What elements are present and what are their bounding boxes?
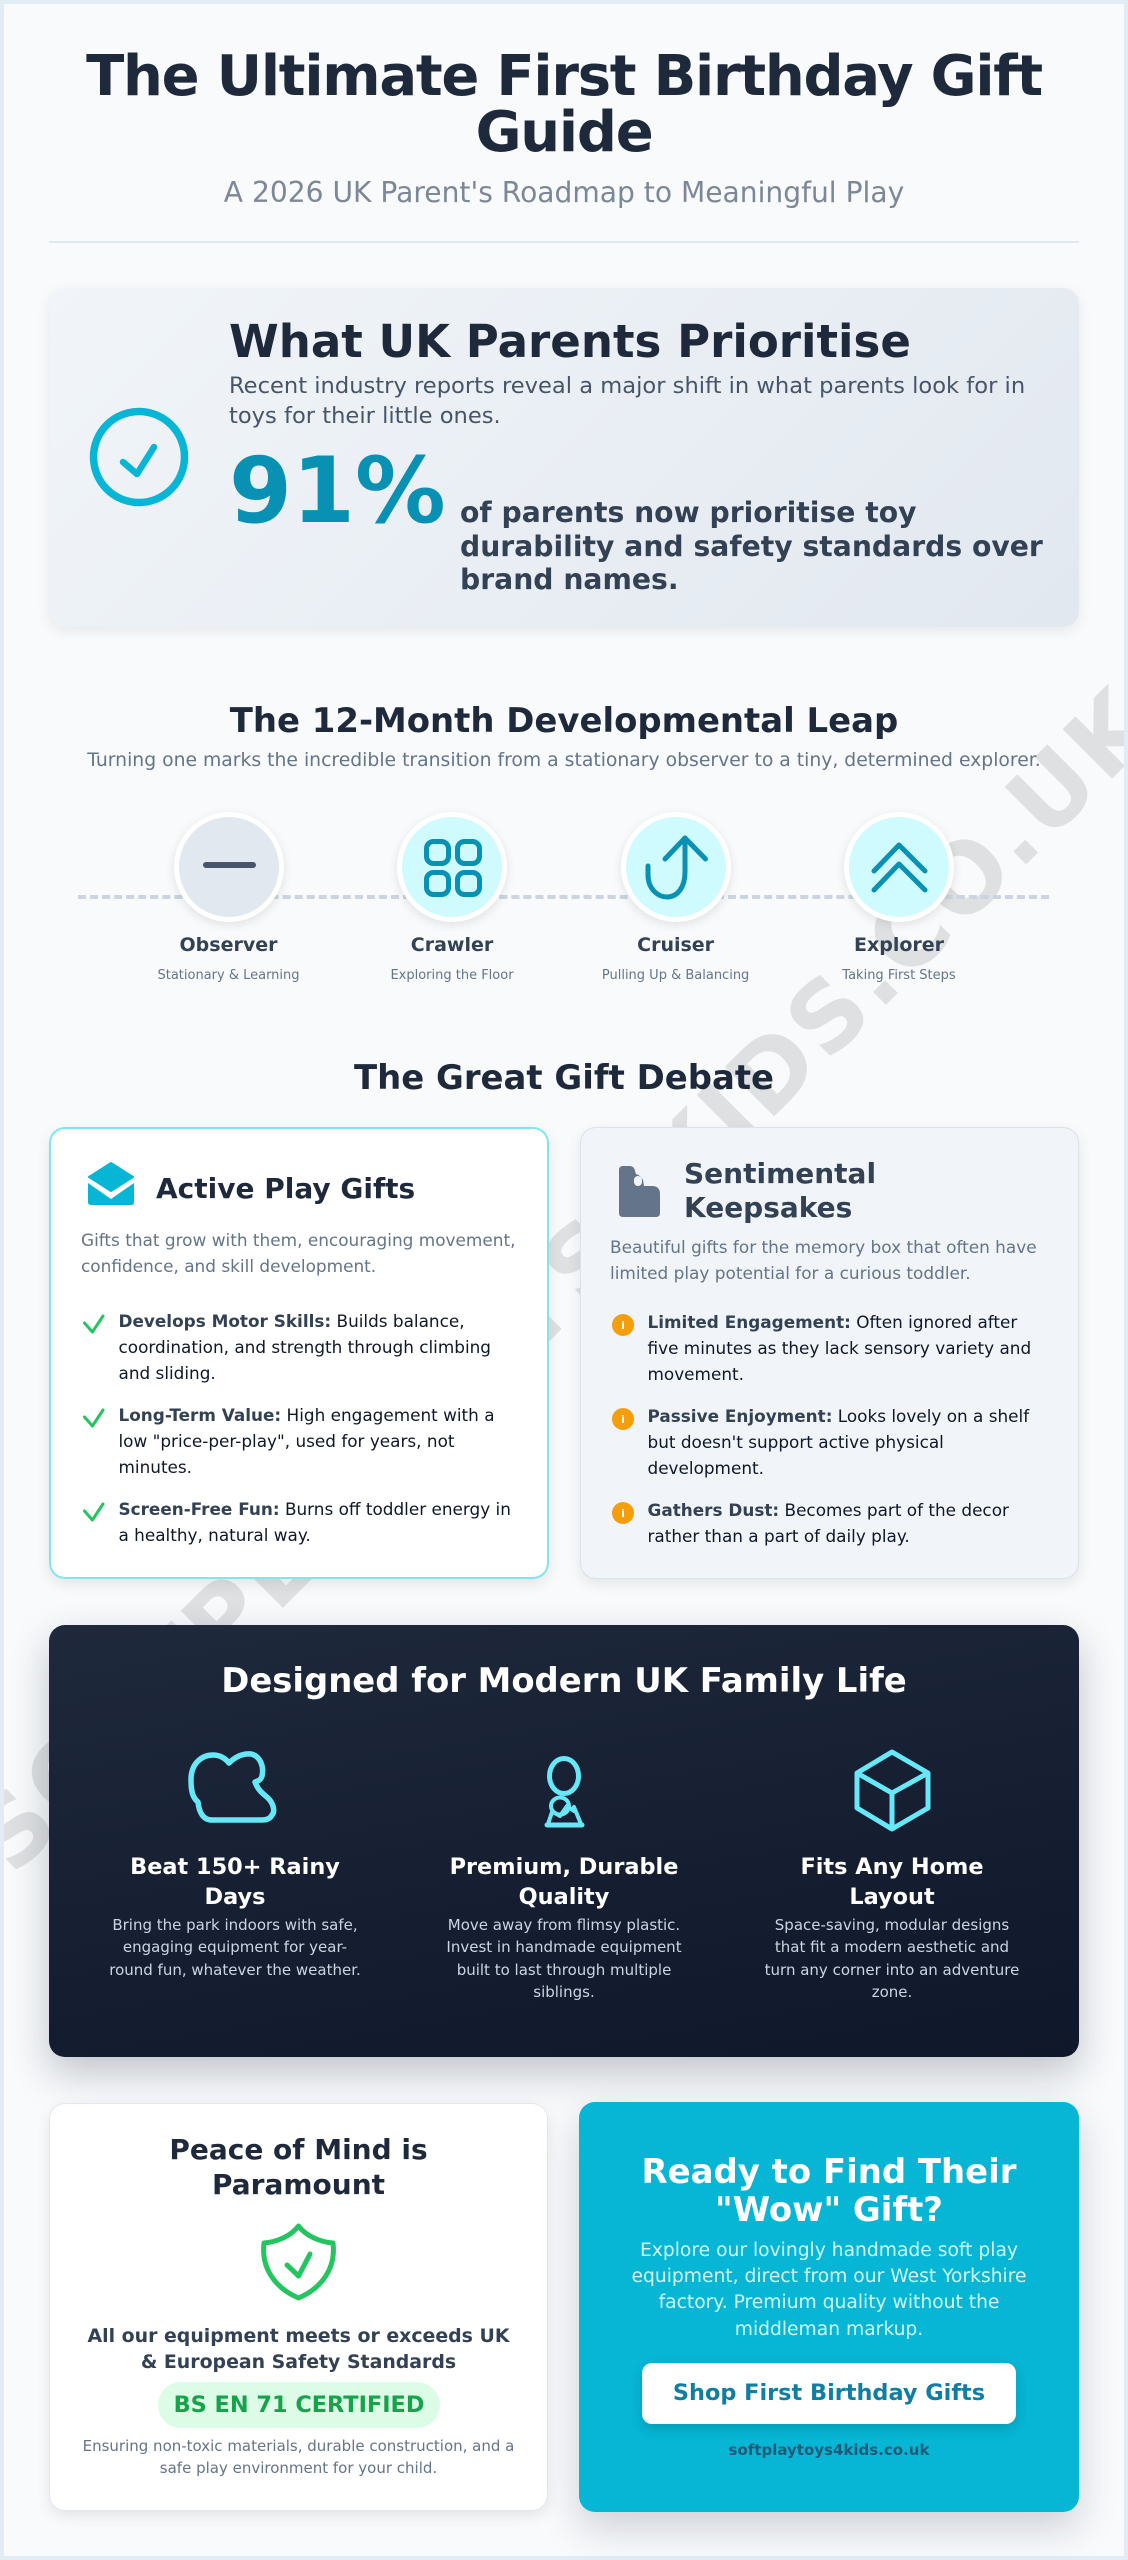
feature title: durable quality: Premium, Durable <box>450 1854 678 1880</box>
text: intro: Recent industry reports reveal a major shift in what parents look for in <box>229 373 1025 399</box>
feature text: home layout: turn any corner into an adventure <box>765 1960 1019 1978</box>
heading: active play gifts: Active Play Gifts <box>156 1172 415 1205</box>
heading: call to action: "Wow" Gift? <box>715 2190 943 2229</box>
text: stat description: durability and safety standards over <box>460 530 1043 563</box>
list item: passive enjoyment: Passive Enjoyment: Looks lovely on a shelf <box>648 1406 1029 1426</box>
list item: limited engagement: Limited Engagement: Often ignored after <box>648 1312 1017 1332</box>
step: cruiser <box>602 817 749 982</box>
icon: grid <box>397 812 507 922</box>
list item: screen-free fun <box>118 1499 511 1545</box>
text: call to action: Explore our lovingly handmade soft play <box>640 2240 1018 2261</box>
heading: sentimental keepsakes <box>684 1157 876 1224</box>
feature text: durable quality: built to last through multiple <box>457 1960 671 1978</box>
heading: sentimental keepsakes: Keepsakes <box>684 1191 852 1224</box>
title: The Ultimate First Birthday Gift <box>86 44 1042 109</box>
feature text: durable quality: Invest in handmade equipment <box>446 1938 682 1956</box>
heading: gift debate: The Great Gift Debate <box>354 1058 774 1097</box>
icon: award figure <box>544 1756 584 1828</box>
heading: what UK parents prioritise: What UK Parents Prioritise <box>229 315 911 368</box>
heading: peace of mind <box>169 2133 428 2200</box>
list item: long-term value: low "price-per-play", used for years, not <box>118 1431 454 1451</box>
feature title: durable quality: Quality <box>519 1884 609 1910</box>
label: explorer: Explorer <box>854 934 944 956</box>
label: cruiser: Cruiser <box>637 934 714 956</box>
stat: 91%: 91% <box>229 439 446 544</box>
feature text: durable quality: Move away from flimsy plastic. <box>448 1916 680 1934</box>
icon: info <box>612 1408 634 1430</box>
text: sentimental description: Beautiful gifts for the memory box that often have <box>610 1237 1037 1257</box>
feature text: home layout: zone. <box>872 1983 912 2001</box>
list item: limited engagement: movement. <box>648 1364 744 1384</box>
list item: gathers dust <box>648 1500 1009 1546</box>
text: safety note: Ensuring non-toxic materials, durable construction, and a <box>83 2436 514 2454</box>
text: call to action <box>579 2238 1079 2343</box>
list item: passive enjoyment: but doesn't support active physical <box>648 1432 944 1452</box>
icon: check <box>82 1408 105 1428</box>
list item: limited engagement <box>648 1312 1031 1384</box>
list item: motor skills: and sliding. <box>118 1363 216 1383</box>
feature text: rainy days: engaging equipment for year- <box>123 1938 347 1956</box>
label: observer: Observer <box>180 934 277 956</box>
feature text: rainy days: Bring the park indoors with safe, <box>112 1916 358 1934</box>
list item: limited engagement: five minutes as they lack sensory variety and <box>648 1338 1031 1358</box>
icon: info: i <box>621 1413 625 1426</box>
panel: what UK parents prioritise <box>49 288 1079 627</box>
feature title: home layout: Layout <box>849 1884 935 1910</box>
icon: check <box>82 1502 105 1522</box>
label: crawler: Crawler <box>411 934 493 956</box>
text: intro: toys for their little ones. <box>229 402 501 428</box>
text: developmental leap intro: Turning one marks the incredible transition from a stationary observer to a tiny, determined explorer. <box>87 750 1041 771</box>
list item: passive enjoyment: development. <box>648 1458 764 1478</box>
text: call to action: factory. Premium quality without the <box>659 2292 999 2313</box>
caption: cruiser: Pulling Up & Balancing <box>602 968 749 982</box>
heading: peace of mind: Peace of Mind is <box>169 2133 428 2166</box>
button: shop gifts <box>642 2363 1016 2424</box>
icon: info <box>612 1314 634 1336</box>
feature title: home layout <box>800 1854 984 1910</box>
text: stat description: of parents now prioritise toy <box>460 496 917 529</box>
text: call to action: middleman markup. <box>735 2319 923 2340</box>
step: crawler <box>390 817 514 982</box>
feature title: rainy days: Days <box>205 1884 265 1910</box>
heading: modern UK family life: Designed for Modern UK Family Life <box>221 1661 907 1700</box>
feature title: rainy days <box>130 1854 340 1910</box>
feature text: durable quality: siblings. <box>533 1983 595 2001</box>
icon: shield check <box>261 2224 336 2300</box>
list item: motor skills: Develops Motor Skills: Builds balance, <box>118 1311 465 1331</box>
panel: modern UK family life <box>49 1625 1079 2057</box>
caption: crawler: Exploring the Floor <box>390 968 514 982</box>
icon: minus <box>174 812 284 922</box>
list item: screen-free fun: a healthy, natural way. <box>118 1525 311 1545</box>
text: intro <box>229 373 1025 428</box>
icon: open box <box>88 1162 134 1205</box>
title: Guide <box>476 100 652 165</box>
icon: info <box>612 1502 634 1524</box>
text: safety note <box>49 2434 548 2480</box>
panel: call to action <box>579 2102 1079 2512</box>
title <box>86 44 1042 165</box>
text: stat description <box>460 496 1043 596</box>
icon: keepsake <box>619 1166 660 1217</box>
icon: cloud <box>188 1751 276 1823</box>
list item: long-term value: minutes. <box>118 1457 192 1477</box>
feature title: home layout: Fits Any Home <box>800 1854 984 1880</box>
feature text: rainy days: round fun, whatever the weather. <box>109 1960 361 1978</box>
subtitle: A 2026 UK Parent's Roadmap to Meaningful Play <box>224 176 904 209</box>
list item: long-term value: Long-Term Value: High engagement with a <box>118 1405 495 1425</box>
icon: check circle <box>90 408 188 506</box>
text: call to action: equipment, direct from our West Yorkshire <box>632 2266 1026 2287</box>
icon: double chevron <box>844 812 954 922</box>
heading: developmental leap: The 12-Month Developmental Leap <box>230 701 898 740</box>
button: shop gifts: Shop First Birthday Gifts <box>673 2380 985 2406</box>
text: safety standards <box>88 2324 510 2372</box>
feature text: home layout: Space-saving, modular designs <box>775 1916 1009 1934</box>
icon: box <box>854 1750 930 1832</box>
text: safety note: safe play environment for your child. <box>160 2459 437 2477</box>
text: active play description: confidence, and skill development. <box>81 1256 376 1276</box>
panel: active play gifts <box>49 1127 549 1579</box>
heading: call to action: Ready to Find Their <box>642 2152 1016 2190</box>
text: stat description: brand names. <box>460 563 679 596</box>
text: active play description <box>81 1230 515 1276</box>
icon: check <box>82 1314 105 1334</box>
panel: peace of mind <box>49 2103 548 2511</box>
step: observer <box>157 817 300 982</box>
step: explorer <box>842 817 956 982</box>
text: website: softplaytoys4kids.co.uk <box>729 2441 929 2459</box>
text: sentimental description: limited play potential for a curious toddler. <box>610 1263 971 1283</box>
feature text: rainy days <box>109 1916 361 1978</box>
feature: rainy days <box>109 1751 361 1978</box>
icon: info: i <box>621 1507 625 1520</box>
feature title: durable quality <box>450 1854 678 1910</box>
heading: sentimental keepsakes: Sentimental <box>684 1157 876 1190</box>
panel: sentimental keepsakes <box>580 1127 1079 1579</box>
feature: durable quality <box>446 1756 682 2001</box>
feature title: rainy days: Beat 150+ Rainy <box>130 1854 340 1880</box>
icon: info: i <box>621 1319 625 1332</box>
text: sentimental description <box>610 1237 1037 1283</box>
feature text: home layout: that fit a modern aesthetic and <box>775 1938 1009 1956</box>
feature text: durable quality <box>446 1916 682 2001</box>
list item: motor skills: coordination, and strength through climbing <box>118 1337 491 1357</box>
text: safety standards: All our equipment meets or exceeds UK <box>88 2324 509 2346</box>
heading: call to action <box>579 2152 1079 2230</box>
badge: BS EN 71 certified: BS EN 71 CERTIFIED <box>174 2392 424 2418</box>
feature: home layout <box>765 1750 1019 2001</box>
badge: BS EN 71 certified <box>158 2382 440 2428</box>
feature text: home layout <box>765 1916 1019 2001</box>
list item: long-term value <box>118 1405 495 1477</box>
list item: passive enjoyment <box>648 1406 1030 1478</box>
icon: up arrow <box>621 812 731 922</box>
text: safety standards: & European Safety Standards <box>141 2350 456 2372</box>
list item: motor skills <box>118 1311 491 1383</box>
heading: peace of mind: Paramount <box>212 2168 385 2200</box>
list item: gathers dust: rather than a part of daily play. <box>648 1526 910 1546</box>
caption: observer: Stationary & Learning <box>157 968 300 982</box>
list item: gathers dust: Gathers Dust: Becomes part of the decor <box>648 1500 1009 1520</box>
caption: explorer: Taking First Steps <box>842 968 956 982</box>
list item: screen-free fun: Screen-Free Fun: Burns off toddler energy in <box>118 1499 511 1519</box>
text: active play description: Gifts that grow with them, encouraging movement, <box>81 1230 515 1250</box>
